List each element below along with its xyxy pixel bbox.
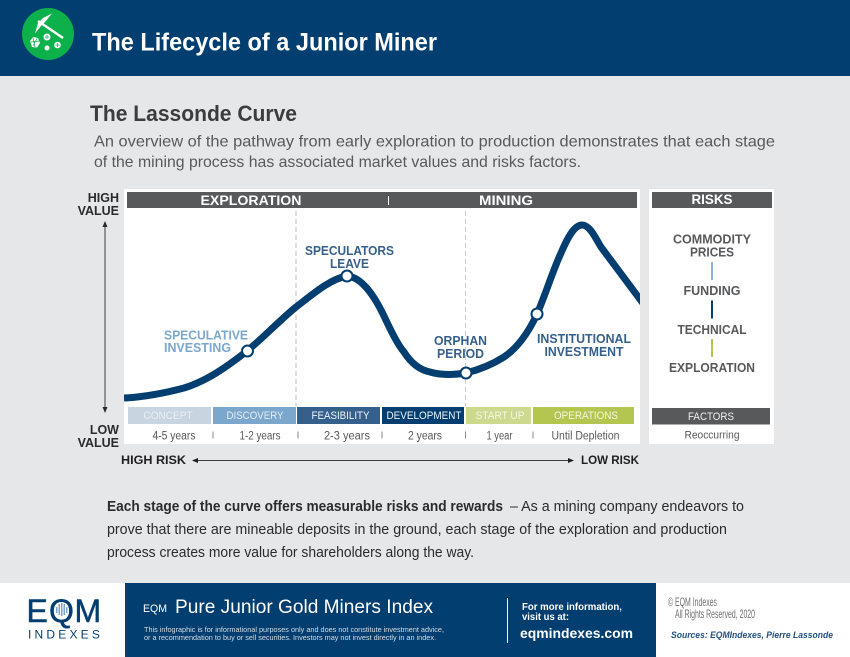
curve	[124, 225, 645, 398]
risk list: COMMODITY	[673, 232, 752, 246]
stage: discovery: DISCOVERY	[226, 410, 284, 422]
low value label	[78, 423, 119, 450]
index name: EQM	[143, 603, 167, 615]
stage: feasibility	[297, 407, 380, 424]
label: orphan period: ORPHAN	[434, 334, 487, 348]
label: speculators leave: SPECULATORS	[305, 244, 394, 258]
intro text	[94, 134, 775, 171]
risk list: EXPLORATION	[669, 361, 755, 375]
logo: EQM Indexes: E	[26, 593, 48, 629]
label: speculative investing: SPECULATIVE	[164, 328, 248, 342]
label: orphan period	[434, 334, 487, 361]
factors bar: FACTORS	[688, 411, 734, 423]
logo: EQM Indexes: Q	[49, 593, 74, 629]
risk list: FUNDING	[684, 284, 740, 298]
label: speculative investing: INVESTING	[164, 341, 231, 355]
intro text: of the mining process has associated market values and risks factors.	[94, 154, 581, 171]
logo: EQM Indexes: INDEXES	[28, 628, 103, 642]
vertical double arrow	[102, 221, 108, 413]
disclaimer: or a recommendation to buy or sell securities. Investors may not invest directly in an index.	[144, 633, 436, 642]
stage: operations	[533, 407, 634, 424]
low value label: LOW	[90, 423, 119, 437]
stage: concept	[128, 407, 211, 424]
sources: Sources: EQMIndexes, Pierre Lassonde	[671, 630, 834, 641]
copyright: All Rights Reserved, 2020	[675, 607, 755, 621]
high value label: VALUE	[78, 204, 119, 218]
stage: operations: OPERATIONS	[554, 410, 618, 422]
footer	[0, 583, 850, 657]
panel: Lassonde curve chart	[124, 189, 645, 444]
intro text: An overview of the pathway from early exploration to production demonstrates that each stage	[94, 134, 775, 150]
low value label: VALUE	[78, 436, 119, 450]
phase header bar	[127, 192, 637, 208]
stage durations: 2-3 years	[324, 430, 370, 442]
contact information	[520, 602, 633, 641]
disclaimer	[144, 625, 444, 642]
label: institutional investment	[537, 332, 631, 359]
stage durations: 1 year	[486, 430, 513, 442]
risk axis: LOW RISK	[581, 453, 639, 467]
risks header: RISKS	[692, 192, 732, 207]
stage durations: 4-5 years	[152, 430, 196, 442]
logo: EQM Indexes	[26, 593, 103, 642]
stage durations: 1-2 years	[240, 430, 281, 442]
copyright: © EQM Indexes	[668, 595, 717, 609]
stage: feasibility: FEASIBILITY	[312, 410, 370, 422]
footer blue panel	[125, 583, 656, 657]
label: institutional investment: INVESTMENT	[544, 345, 624, 359]
title: The Lifecycle of a Junior Miner	[92, 28, 437, 56]
stage: development	[382, 407, 464, 424]
footer blue panel: Pure Junior Gold Miners Index	[175, 597, 433, 618]
contact information: visit us at:	[522, 612, 569, 623]
disclaimer: This infographic is for informational purposes only and does not constitute investment advice,	[144, 625, 444, 634]
high value label	[78, 191, 119, 218]
stage: discovery	[213, 407, 296, 424]
body text: prove that there are mineable deposits in the ground, each stage of the exploration and production	[107, 522, 727, 538]
risk list: PRICES	[690, 246, 734, 260]
label: speculative investing	[164, 328, 248, 355]
stage bars	[128, 407, 634, 424]
icon: green circle with pickaxe and ore	[22, 8, 74, 60]
phase header bar: MINING	[479, 193, 533, 208]
stage: concept: CONCEPT	[144, 410, 193, 422]
factors value: Reoccurring	[684, 430, 740, 442]
high value label: HIGH	[88, 191, 119, 205]
factors bar	[652, 408, 770, 424]
stage durations: Until Depletion	[552, 430, 620, 442]
stage durations	[152, 430, 620, 442]
risk axis: HIGH RISK	[121, 453, 186, 467]
contact information: eqmindexes.com	[520, 626, 633, 641]
risk list: TECHNICAL	[678, 323, 747, 337]
body text: process creates more value for shareholders along the way.	[107, 545, 474, 561]
label: speculators leave: LEAVE	[330, 257, 369, 271]
stage: start up	[466, 407, 531, 424]
label: speculators leave	[305, 244, 394, 271]
body text: Each stage of the curve offers measurable risks and rewards	[107, 499, 503, 515]
risk list	[669, 232, 755, 375]
value axis	[78, 191, 119, 450]
body text	[107, 499, 744, 561]
copyright	[668, 595, 755, 621]
risks header	[652, 192, 772, 208]
stage: development: DEVELOPMENT	[386, 410, 462, 422]
panel: risks	[649, 189, 774, 444]
stage: start up: START UP	[476, 410, 524, 422]
header banner	[0, 0, 850, 76]
logo: EQM Indexes: M	[74, 593, 101, 629]
body text: – As a mining company endeavors to	[510, 499, 744, 515]
curve markers	[242, 270, 542, 378]
label: institutional investment: INSTITUTIONAL	[537, 332, 631, 346]
heading: The Lassonde Curve: The Lassonde Curve	[90, 101, 297, 126]
phase header bar: EXPLORATION	[200, 193, 302, 208]
contact information: For more information,	[522, 602, 622, 613]
stage durations: 2 years	[408, 430, 442, 442]
risk axis	[121, 453, 639, 467]
label: orphan period: PERIOD	[437, 347, 484, 361]
